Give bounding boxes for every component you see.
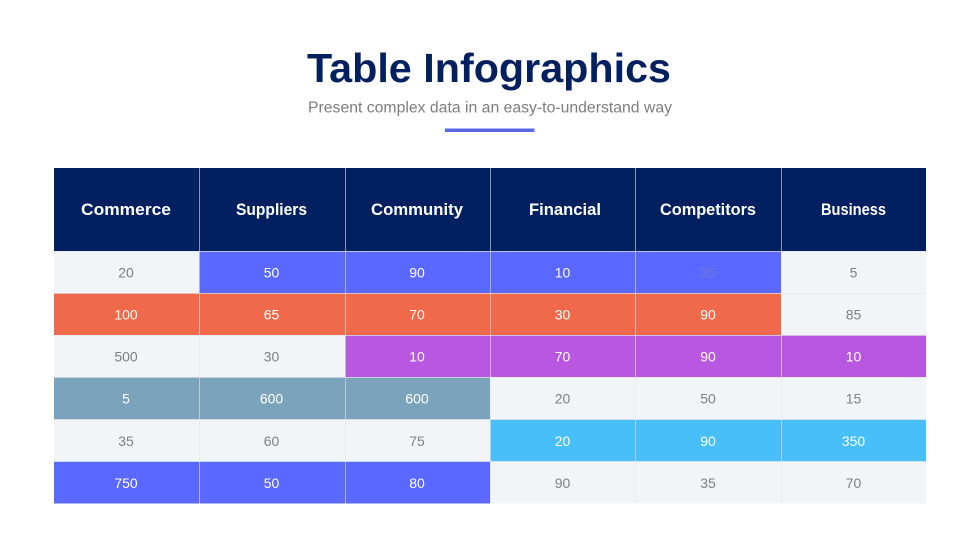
row 2: 100 bbox=[114, 306, 138, 322]
header row bbox=[54, 168, 926, 251]
row 6: 90 bbox=[555, 475, 570, 491]
row 6: 70 bbox=[846, 475, 861, 491]
row 3: 10 bbox=[409, 348, 425, 364]
row 4: 600 bbox=[260, 390, 283, 406]
row 3: 500 bbox=[114, 348, 138, 364]
header: Financial: Financial bbox=[529, 201, 601, 219]
row 4: 15 bbox=[846, 390, 861, 406]
row 6: 750 bbox=[114, 475, 138, 491]
row 6: 35 bbox=[700, 475, 716, 491]
header: Community: Community bbox=[371, 201, 464, 219]
row 5: 20 bbox=[555, 433, 570, 449]
header: Commerce: Commerce bbox=[81, 201, 171, 219]
row 4: 50 bbox=[700, 390, 716, 406]
row 1: 20 bbox=[118, 264, 134, 280]
row 4 bbox=[54, 377, 926, 420]
row 2: 90 bbox=[700, 306, 716, 322]
header: Competitors: Competitors bbox=[660, 201, 756, 219]
accent underline bbox=[445, 128, 534, 132]
row 1: 90 bbox=[409, 264, 425, 280]
row 1 bbox=[54, 251, 926, 293]
row 2: 70 bbox=[409, 306, 425, 322]
row 5 bbox=[54, 420, 926, 462]
row 5: 35 bbox=[118, 433, 134, 449]
row 3 bbox=[54, 335, 926, 377]
row 5: 90 bbox=[700, 433, 716, 449]
title: Table Infographics bbox=[307, 45, 671, 91]
row 4: 5 bbox=[122, 390, 130, 406]
row 5: 60 bbox=[264, 433, 279, 449]
header: Suppliers: Suppliers bbox=[236, 201, 307, 219]
row 3: 70 bbox=[555, 348, 570, 364]
row 3: 30 bbox=[264, 348, 279, 364]
row 1: 10 bbox=[555, 264, 570, 280]
row 5: 75 bbox=[409, 433, 425, 449]
data table bbox=[54, 168, 926, 504]
row 1: 5 bbox=[850, 264, 858, 280]
row 4: 20 bbox=[555, 390, 570, 406]
row 3: 90 bbox=[700, 348, 716, 364]
row 5: 350 bbox=[842, 433, 865, 449]
row 2: 30 bbox=[555, 306, 570, 322]
subtitle: Present complex data in an easy-to-understand way bbox=[308, 100, 672, 116]
row 2 bbox=[54, 293, 926, 335]
row 1: 35 bbox=[700, 264, 716, 280]
row 1: 50 bbox=[264, 264, 279, 280]
row 2: 85 bbox=[846, 306, 861, 322]
header: Business: Business bbox=[821, 201, 886, 219]
row 6: 50 bbox=[264, 475, 279, 491]
row 3: 10 bbox=[846, 348, 861, 364]
row 6: 80 bbox=[409, 475, 425, 491]
row 2: 65 bbox=[264, 306, 279, 322]
row 4: 600 bbox=[405, 390, 429, 406]
row 6 bbox=[54, 462, 926, 504]
